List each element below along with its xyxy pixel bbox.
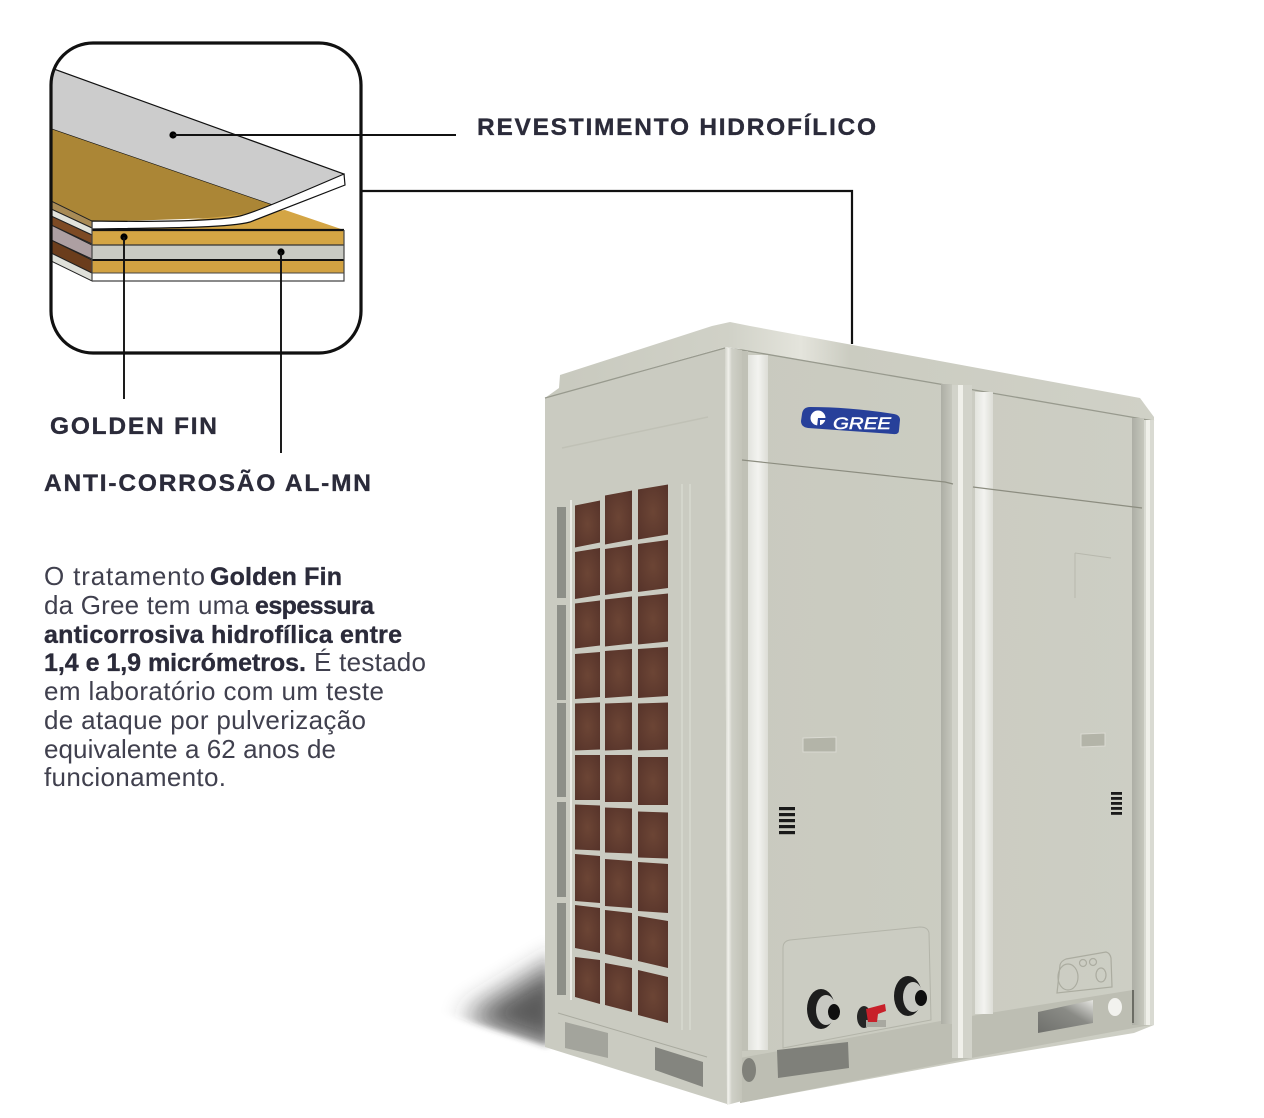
unit: strip left panel [748,355,768,1050]
text block: description: em laboratório com um teste [44,676,384,706]
unit: vent slots left [779,807,795,834]
heading: anti-corrosao: ANTI-CORROSÃO AL-MN [44,469,371,497]
layer: golden top sheet [51,129,272,222]
icon: red valve [857,1004,886,1028]
unit: door outline faint [1075,553,1111,598]
text block: description: Golden Fin [210,563,342,591]
logo: GREE badge: GREE [833,414,892,433]
unit: middle post [952,385,972,1058]
text block: description: espessura [255,592,375,620]
unit: lid [545,322,1154,421]
unit: panel seams [742,460,1142,508]
text block: description: de ataque por pulverização [44,705,366,735]
layer: white peeled strip [92,174,345,229]
layer: hydrophilic coating top [51,68,344,205]
unit: access panel [783,927,931,1048]
heading: golden fin: GOLDEN FIN [50,413,217,440]
unit: right connector plate [1057,952,1112,993]
unit: labels on panels [803,733,1105,752]
icon: right pipe [894,976,927,1016]
unit: front face [740,347,1154,1103]
text block: description [44,561,426,792]
diagram: fin layers panel [51,43,361,353]
text block: description: anticorrosiva hidrofílica entre [44,621,402,649]
unit shadow [462,955,565,1055]
heading: revestimento hidrofilico: REVESTIMENTO HIDROFÍLICO [477,113,876,141]
unit: corner post [725,347,742,1105]
layers: front edge bands [92,222,344,281]
unit: left base vents [558,1013,707,1087]
text block: description: funcionamento. [44,762,226,792]
text block: description: 1,4 e 1,9 micrómetros. [44,649,306,677]
panel frame [51,43,361,353]
leader: golden fin line [120,233,128,399]
text block: description: É testado [314,647,426,677]
icon: left pipe [807,989,840,1029]
connector: panel to unit [361,191,852,344]
text block: description: da Gree tem uma [44,590,250,620]
unit: base front [740,988,1150,1103]
layers: left side edge [51,201,92,281]
unit: left face [545,347,727,1104]
text block: description: equivalente a 62 anos de [44,734,336,764]
unit: front base vents [742,990,1133,1082]
outdoor unit [545,322,1154,1105]
layer: golden lower sheet [140,210,341,229]
logo: GREE badge [801,407,900,434]
unit: strip right panel [975,392,993,1014]
unit: channels [742,351,1154,1051]
unit: vent slots right [1111,792,1122,815]
leader: revestimento line [169,131,456,139]
leader: anti-corrosion line [277,248,285,453]
unit: left grille [557,484,690,1030]
text block: description: O tratamento [44,561,205,591]
